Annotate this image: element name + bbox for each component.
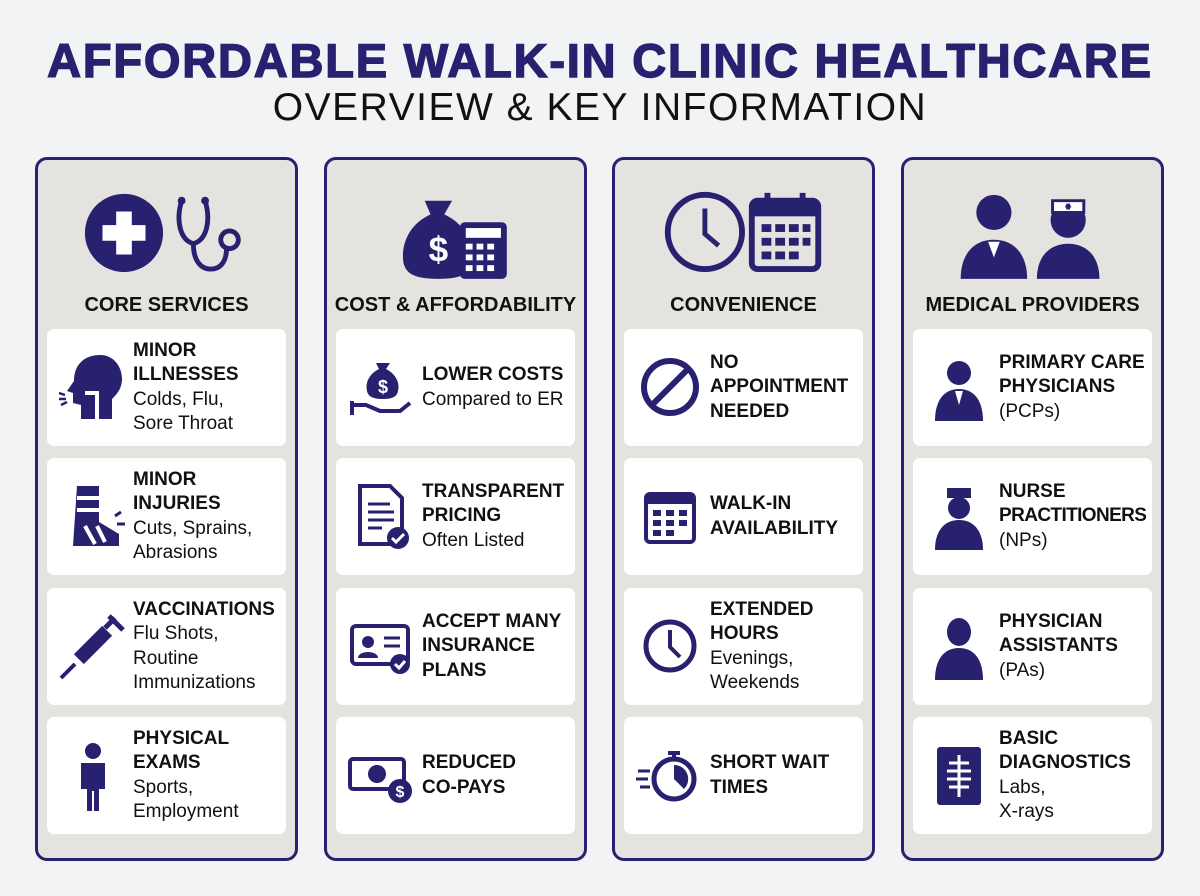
icon: money bag and calculator: [402, 200, 507, 279]
card: lower costs: [336, 329, 575, 446]
card: nurse practitioners: PRACTITIONERS: [999, 505, 1146, 526]
card: nurse practitioners: [913, 458, 1152, 575]
icon: medical cross and stethoscope: [84, 194, 241, 272]
card: physical exams: Employment: [133, 801, 239, 822]
card: vaccinations: VACCINATIONS: [133, 598, 275, 620]
subtitle: OVERVIEW & KEY INFORMATION: [273, 86, 927, 129]
card: minor injuries: MINOR: [133, 468, 196, 490]
card: minor injuries: INJURIES: [133, 493, 221, 514]
panel: convenience: [612, 157, 875, 861]
card: lower costs: LOWER COSTS: [422, 364, 563, 385]
card: vaccinations: [47, 588, 286, 705]
card: physician assistants: PHYSICIAN: [999, 611, 1102, 632]
heading: CORE SERVICES: [84, 294, 249, 316]
card: physician assistants: ASSISTANTS: [999, 635, 1118, 656]
card: lower costs: Compared to ER: [422, 388, 564, 410]
card: physical exams: EXAMS: [133, 752, 201, 773]
card: transparent pricing: [336, 458, 575, 575]
panel: cost & affordability: [324, 157, 587, 861]
card: insurance plans: ACCEPT MANY: [422, 611, 561, 632]
card: vaccinations: Flu Shots,: [133, 623, 219, 644]
card: physical exams: PHYSICAL: [133, 728, 229, 748]
card: minor illnesses: Sore Throat: [133, 413, 233, 434]
card: physician assistants: [913, 588, 1152, 705]
card: extended hours: HOURS: [710, 623, 779, 644]
heading: MEDICAL PROVIDERS: [925, 294, 1140, 316]
card: minor illnesses: ILLNESSES: [133, 364, 239, 385]
card: basic diagnostics: Labs,: [999, 776, 1045, 798]
card: transparent pricing: Often Listed: [422, 530, 524, 551]
card: primary care physicians: PHYSICIANS: [999, 376, 1115, 397]
card: minor injuries: Cuts, Sprains,: [133, 518, 252, 538]
card: transparent pricing: PRICING: [422, 505, 501, 526]
card: reduced co-pays: $: [396, 784, 405, 801]
card: primary care physicians: [913, 329, 1152, 446]
icon: clock and calendar: [664, 192, 822, 272]
card: minor illnesses: MINOR: [133, 340, 196, 360]
card: minor injuries: Abrasions: [133, 542, 218, 563]
card: reduced co-pays: [336, 717, 575, 834]
card: basic diagnostics: BASIC: [999, 728, 1058, 748]
card: extended hours: Weekends: [710, 672, 799, 693]
card: primary care physicians: PRIMARY CARE: [999, 352, 1145, 373]
title: AFFORDABLE WALK-IN CLINIC HEALTHCARE: [47, 34, 1153, 87]
card: insurance plans: [336, 588, 575, 705]
card: vaccinations: Routine: [133, 648, 198, 668]
card: nurse practitioners: (NPs): [999, 530, 1048, 551]
card: insurance plans: PLANS: [422, 660, 486, 681]
card: no appointment: NO: [710, 352, 738, 373]
heading: COST & AFFORDABILITY: [335, 294, 576, 316]
card: short wait times: SHORT WAIT: [710, 752, 829, 773]
card: minor injuries: [47, 458, 286, 575]
card: minor illnesses: [47, 329, 286, 446]
card: reduced co-pays: REDUCED: [422, 752, 516, 773]
card: short wait times: [624, 717, 863, 834]
card: physical exams: Sports,: [133, 776, 193, 798]
card: basic diagnostics: X-rays: [999, 801, 1054, 822]
card: short wait times: TIMES: [710, 776, 768, 798]
card: physician assistants: (PAs): [999, 660, 1045, 681]
card: transparent pricing: TRANSPARENT: [422, 481, 564, 502]
card: nurse practitioners: NURSE: [999, 481, 1066, 502]
panel: core services: [35, 157, 298, 861]
card: extended hours: EXTENDED: [710, 598, 813, 620]
card: physical exams: [47, 717, 286, 834]
icon: money bag and calculator: $: [429, 230, 449, 269]
card: basic diagnostics: [913, 717, 1152, 834]
card: insurance plans: INSURANCE: [422, 635, 535, 656]
card: no appointment: [624, 329, 863, 446]
card: vaccinations: Immunizations: [133, 672, 256, 693]
card: minor illnesses: Colds, Flu,: [133, 388, 224, 410]
card: walk-in availability: AVAILABILITY: [710, 518, 838, 538]
card: extended hours: Evenings,: [710, 648, 793, 668]
card: basic diagnostics: DIAGNOSTICS: [999, 752, 1131, 773]
card: lower costs: $: [378, 377, 388, 397]
card: extended hours: [624, 588, 863, 705]
card: no appointment: APPOINTMENT: [710, 376, 848, 397]
card: no appointment: NEEDED: [710, 401, 789, 422]
card: walk-in availability: [624, 458, 863, 575]
card: walk-in availability: WALK-IN: [710, 493, 791, 514]
panel: medical providers: [901, 157, 1164, 861]
heading: CONVENIENCE: [670, 294, 817, 316]
card: reduced co-pays: CO-PAYS: [422, 776, 505, 798]
icon: doctor and nurse: [960, 194, 1100, 279]
card: primary care physicians: (PCPs): [999, 401, 1060, 422]
